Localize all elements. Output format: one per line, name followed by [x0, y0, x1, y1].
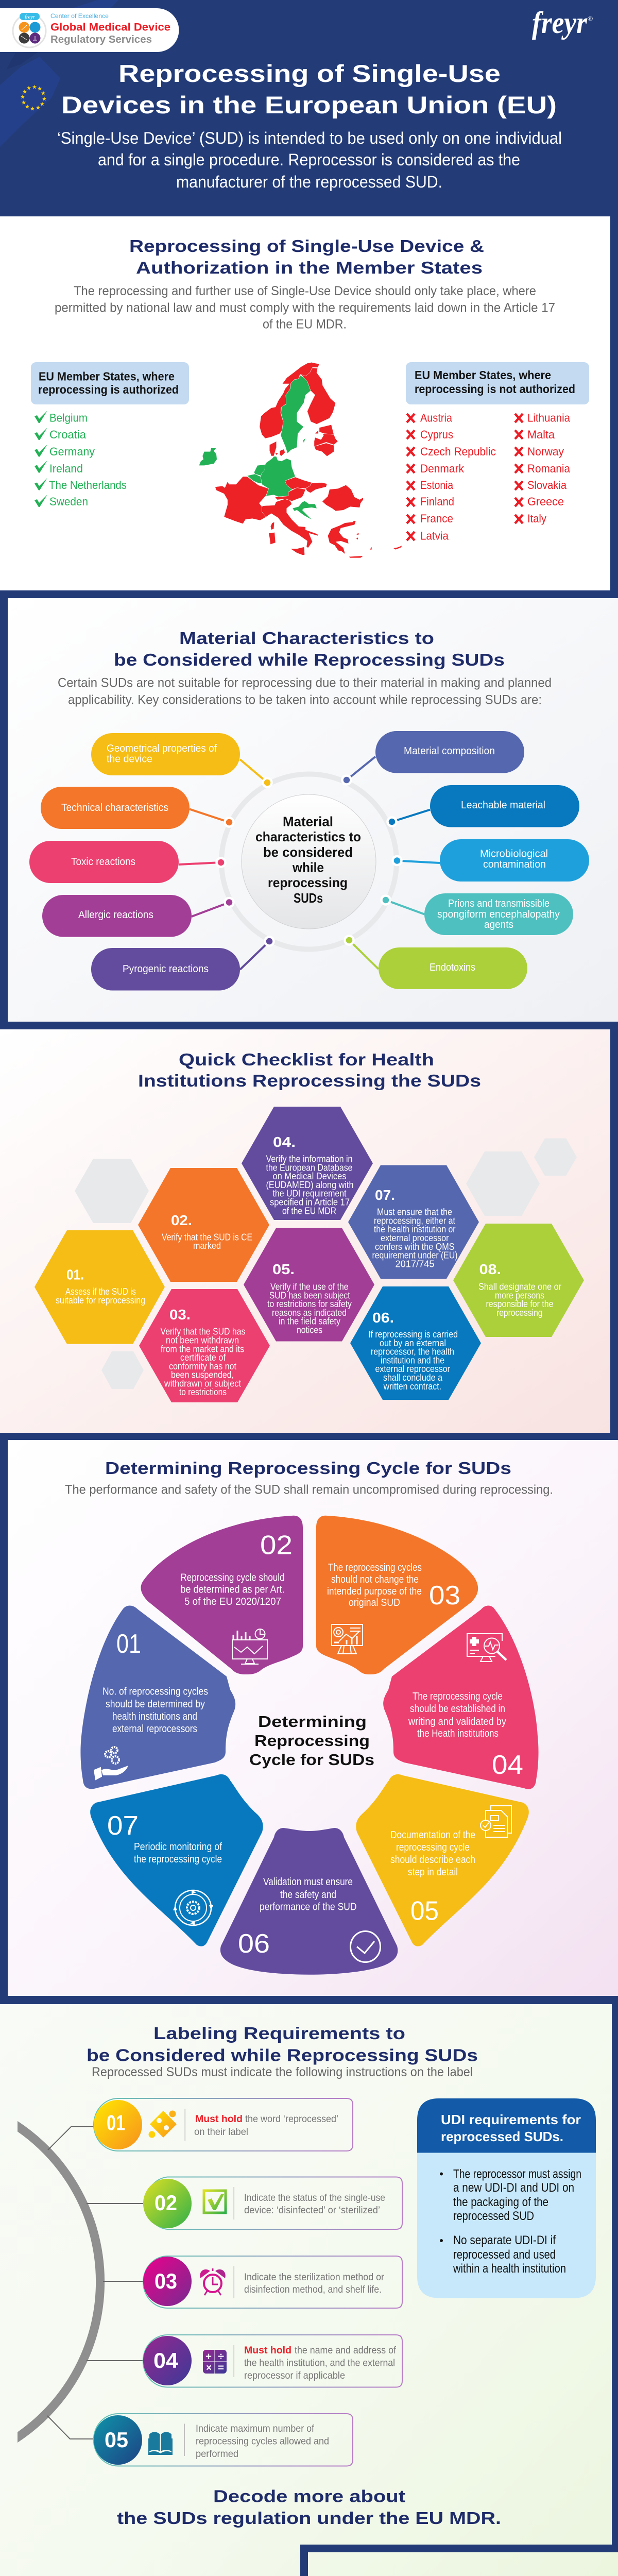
item: France — [407, 512, 453, 525]
pill: geometrical properties — [91, 733, 240, 775]
pill: prions: Prions and transmissible — [448, 898, 550, 909]
petal 02: 02 — [260, 1530, 293, 1560]
requirement 03 — [143, 2256, 402, 2308]
icon: checkbox — [204, 2191, 226, 2213]
petal 07: 07 — [107, 1811, 139, 1841]
intro text: and for a single procedure. Reprocessor is considered as the — [98, 150, 520, 169]
callout: UDI requirements: a new UDI-DI and UDI on — [453, 2181, 574, 2195]
requirement 01: 01 — [107, 2110, 125, 2135]
requirement 02 — [143, 2177, 402, 2229]
petal 02: be determined as per Art. — [180, 1584, 284, 1595]
petal 04: the Heath institutions — [417, 1728, 499, 1739]
title: Devices in the European Union (EU) — [61, 91, 557, 118]
icon: calculator: = — [218, 2363, 224, 2374]
icon: calculator: × — [206, 2363, 212, 2374]
item: Austria: Austria — [420, 411, 453, 425]
pill: leachable material — [430, 785, 579, 827]
icon: presentation board — [332, 1624, 363, 1654]
description: of the EU MDR. — [263, 317, 347, 332]
pill: technical characteristics: Technical characteristics — [61, 802, 168, 814]
item: Sweden: Sweden — [49, 495, 88, 508]
item: Germany: Germany — [49, 445, 95, 458]
petal 04 — [383, 1605, 539, 1789]
step 03: to restrictions — [179, 1387, 227, 1397]
item: Finland: Finland — [420, 495, 454, 508]
petal 03: The reprocessing cycles — [328, 1562, 422, 1573]
item: Cyprus: Cyprus — [420, 428, 453, 441]
petal 01: should be determined by — [106, 1699, 205, 1710]
step 03: Verify that the SUD has — [161, 1327, 245, 1337]
icon: check circle — [350, 1931, 380, 1962]
map: Europe — [199, 362, 402, 558]
petal 03: 03 — [429, 1581, 460, 1611]
pill: material composition — [375, 731, 524, 773]
requirement 03: Indicate the sterilization method or — [244, 2272, 384, 2283]
heading — [129, 236, 484, 277]
call to action heading: the SUDs regulation under the EU MDR. — [117, 2509, 501, 2528]
step 06: out by an external — [380, 1338, 446, 1348]
heading: be Considered while Reprocessing SUDs — [87, 2045, 478, 2065]
item: Latvia — [407, 530, 449, 542]
requirement 02: 02 — [154, 2191, 177, 2215]
item: Ireland: Ireland — [49, 462, 83, 475]
step 05 — [244, 1228, 374, 1342]
logo: freyr: ® — [588, 16, 593, 22]
panel: quick checklist — [0, 1029, 610, 1433]
callout: UDI requirements: reprocessed SUDs. — [441, 2129, 563, 2144]
item: Finland — [407, 495, 454, 508]
connectors — [47, 2127, 143, 2439]
step 07: confers with the QMS — [375, 1242, 454, 1252]
callout: authorized heading: EU Member States, where — [39, 370, 175, 383]
center label: Cycle for SUDs — [249, 1751, 374, 1769]
connectors — [179, 757, 440, 970]
step 05: notices — [297, 1325, 322, 1335]
step 04: on Medical Devices — [273, 1171, 346, 1181]
step 05: 05. — [272, 1261, 295, 1277]
petal 06 — [220, 1828, 398, 1975]
step 01: 01. — [66, 1266, 84, 1283]
step 04 — [242, 1107, 373, 1220]
center hub: while — [292, 859, 324, 875]
step 06: 06. — [372, 1310, 394, 1326]
icon: dashboard monitor — [232, 1629, 267, 1664]
step 06: If reprocessing is carried — [368, 1329, 458, 1340]
petal 06: 06 — [238, 1929, 270, 1959]
requirement 05: Indicate maximum number of — [196, 2423, 315, 2434]
item: Belgium: Belgium — [49, 411, 88, 425]
logo: freyr: freyr — [532, 6, 588, 40]
step 03: conformity has not — [169, 1361, 236, 1371]
requirement 01 — [94, 2098, 353, 2151]
icon: monitor and magnifier — [467, 1634, 506, 1662]
step 04: Verify the information in — [266, 1154, 352, 1164]
petal 05: reprocessing cycle — [396, 1842, 470, 1853]
description — [55, 284, 555, 332]
panel: authorization in member states — [0, 216, 610, 590]
step 04: (EUDAMED) along with — [266, 1180, 353, 1190]
petal 03 — [316, 1516, 478, 1674]
step 05: reasons as indicated — [272, 1308, 347, 1318]
petal 01: health institutions and — [112, 1711, 197, 1722]
step 08: more persons — [495, 1290, 544, 1300]
step 05: in the field safety — [279, 1316, 340, 1327]
requirement 03: disinfection method, and shelf life. — [244, 2284, 382, 2295]
pill: leachable material: Leachable material — [461, 800, 545, 811]
step 02: marked — [193, 1241, 221, 1251]
step 03: certificate of — [180, 1352, 226, 1363]
callout: not authorized heading: reprocessing is not authorized — [415, 382, 575, 396]
icon: cycle gear — [173, 1890, 213, 1925]
requirement 01: on their label — [194, 2126, 248, 2138]
item: Greece: Greece — [527, 495, 564, 508]
step 02: Verify that the SUD is CE — [162, 1232, 252, 1243]
center label: Determining — [258, 1713, 367, 1731]
icon: EU stars — [21, 84, 46, 111]
petal 03: should not change the — [331, 1574, 419, 1585]
item: France: France — [420, 512, 453, 525]
item: Italy — [515, 512, 546, 525]
step 05: Verify if the use of the — [270, 1282, 348, 1292]
badge: center of excellence — [0, 8, 179, 52]
item: Estonia: Estonia — [420, 479, 454, 492]
step 04: the UDI requirement — [273, 1189, 346, 1199]
pill: technical characteristics — [41, 787, 190, 829]
badge: center of excellence: Global Medical Device — [50, 22, 170, 33]
item: Ireland — [35, 461, 83, 475]
pill: geometrical properties: Geometrical properties of — [107, 743, 217, 754]
pill: prions: agents — [484, 919, 513, 930]
step 06: reprocessor, the health — [371, 1347, 454, 1357]
panel: labeling requirements — [0, 2004, 618, 2576]
heading: Material Characteristics to — [179, 629, 434, 648]
item: Malta: Malta — [527, 428, 555, 441]
item: The Netherlands: The Netherlands — [49, 479, 127, 492]
call to action heading: Decode more about — [213, 2486, 405, 2506]
callout: authorized heading: reprocessing is authorized — [38, 383, 179, 396]
item: Belgium — [35, 411, 88, 425]
item: Norway: Norway — [527, 445, 564, 458]
requirement 04: reprocessor if applicable — [244, 2370, 345, 2381]
requirement 05: performed — [196, 2448, 238, 2460]
center hub: characteristics to — [255, 829, 361, 844]
petal 02: Reprocessing cycle should — [180, 1572, 284, 1584]
item: Croatia — [35, 428, 87, 441]
heading: Labeling Requirements to — [153, 2024, 405, 2043]
requirement 05: reprocessing cycles allowed and — [196, 2436, 329, 2447]
callout: UDI requirements: the packaging of the — [453, 2195, 548, 2209]
step 08: responsible for the — [486, 1299, 553, 1309]
heading: Quick Checklist for Health — [179, 1050, 434, 1069]
item: Estonia — [407, 479, 454, 492]
callout: UDI requirements: The reprocessor must assign — [453, 2167, 581, 2181]
heading: Determining Reprocessing Cycle for SUDs — [105, 1459, 511, 1478]
call to action heading — [117, 2486, 501, 2528]
callout: UDI requirements: No separate UDI-DI if — [453, 2233, 556, 2247]
petal 04: should be established in — [410, 1703, 505, 1715]
callout: not authorized heading: EU Member States, where — [415, 368, 551, 382]
step 06: external reprocessor — [375, 1364, 450, 1374]
step 02 — [138, 1168, 269, 1282]
pill: microbiological contamination: Microbiological — [480, 848, 548, 859]
icon: calculator — [203, 2350, 227, 2374]
center hub — [242, 794, 376, 929]
pill: endotoxins: Endotoxins — [430, 962, 475, 973]
petal 06: the safety and — [280, 1889, 336, 1901]
step 04: of the EU MDR — [282, 1206, 336, 1216]
petal 07: Periodic monitoring of — [134, 1841, 222, 1853]
heading: Institutions Reprocessing the SUDs — [138, 1071, 481, 1090]
step 08: Shall designate one or — [478, 1282, 561, 1292]
item: Latvia: Latvia — [420, 530, 449, 542]
requirement 05: 05 — [105, 2428, 128, 2452]
step 07: Must ensure that the — [377, 1207, 452, 1217]
requirement 05 — [94, 2414, 353, 2466]
pill: material composition: Material composition — [404, 745, 495, 757]
pill: microbiological contamination — [440, 839, 589, 882]
icon: calculator: ÷ — [218, 2351, 224, 2362]
icon: gears and hand — [94, 1747, 128, 1780]
callout: UDI requirements: within a health institution — [453, 2262, 566, 2276]
description: applicability. Key considerations to be taken into account while reprocessing SUDs are: — [68, 692, 542, 707]
pill: toxic reactions — [29, 841, 179, 883]
step 03: 03. — [169, 1307, 191, 1323]
arrow — [291, 2545, 618, 2576]
step 07: reprocessing, either at — [374, 1215, 455, 1226]
step 04: 04. — [273, 1134, 296, 1150]
item: Lithuania: Lithuania — [527, 411, 571, 425]
requirement 04: Must hold — [244, 2345, 291, 2356]
decorative gray hexagons — [75, 1139, 577, 1389]
step 03: not been withdrawn — [166, 1335, 239, 1346]
center hub: SUDs — [294, 890, 323, 906]
petal 01: 01 — [116, 1629, 141, 1659]
petal 07 — [90, 1774, 263, 1946]
item: Denmark: Denmark — [420, 462, 465, 475]
heading: be Considered while Reprocessing SUDs — [114, 650, 505, 669]
step 02: 02. — [171, 1212, 192, 1228]
panel: material characteristics — [8, 598, 618, 1022]
step 08: reprocessing — [496, 1308, 543, 1318]
center label: Reprocessing — [254, 1732, 370, 1750]
badge: center of excellence: Center of Excellence — [50, 12, 109, 20]
petal 04: The reprocessing cycle — [413, 1691, 503, 1702]
callout: UDI requirements: reprocessed SUD — [453, 2209, 534, 2223]
heading — [87, 2024, 478, 2065]
pill: endotoxins — [379, 947, 527, 989]
pill: prions: spongiform encephalopathy — [437, 909, 560, 920]
ring nodes — [216, 776, 402, 946]
item: Slovakia: Slovakia — [527, 479, 567, 492]
step 07: external processor — [381, 1233, 449, 1243]
intro text: manufacturer of the reprocessed SUD. — [176, 173, 442, 191]
item: Romania: Romania — [527, 462, 571, 475]
step 07: 2017/745 — [396, 1259, 435, 1269]
step 06: shall conclude a — [383, 1372, 443, 1383]
panel: determining reprocessing cycle — [8, 1440, 618, 1996]
step 03: withdrawn or subject — [164, 1379, 241, 1389]
heading: Reprocessing of Single-Use Device & — [129, 236, 484, 256]
pill: microbiological contamination: contamination — [483, 859, 546, 870]
petal 06: performance of the SUD — [260, 1901, 356, 1912]
badge: center of excellence: Regulatory Services — [50, 34, 152, 45]
step 03: been suspended, — [171, 1370, 234, 1380]
step 06: institution and the — [381, 1355, 444, 1365]
icon: puzzle — [148, 2110, 177, 2138]
petal 02 — [141, 1516, 303, 1674]
requirement 02: device: ‘disinfected’ or ‘sterilized’ — [244, 2205, 380, 2216]
pill: pyrogenic reactions: Pyrogenic reactions — [123, 963, 209, 975]
petal 06: Validation must ensure — [263, 1876, 353, 1888]
step 03 — [139, 1289, 270, 1402]
petal 05: step in detail — [408, 1867, 458, 1878]
heading — [138, 1050, 481, 1090]
requirement 01: Must hold — [195, 2113, 243, 2125]
list: authorized states — [35, 411, 127, 508]
step 07: requirement under (EU) — [372, 1250, 457, 1261]
item: Germany — [35, 444, 95, 458]
description: permitted by national law and must comply with the requirements laid down in the Article 17 — [55, 301, 555, 315]
item: Czech Republic: Czech Republic — [420, 445, 496, 458]
requirement 02: Indicate the status of the single-use — [244, 2192, 385, 2204]
pill: prions — [424, 893, 573, 935]
intro text — [57, 129, 562, 191]
requirement 04: 04 — [153, 2348, 179, 2372]
item: Italy: Italy — [527, 512, 546, 525]
page frame strip — [612, 2004, 618, 2552]
petal 04: writing and validated by — [408, 1716, 506, 1727]
icon: alarm clock — [200, 2268, 226, 2295]
step 03: from the market and its — [161, 1344, 244, 1354]
requirement 04: the health institution, and the external — [244, 2358, 395, 2369]
center hub: reprocessing — [268, 875, 348, 890]
center hub: Material — [283, 814, 333, 829]
pill: allergic reactions — [42, 895, 192, 937]
badge: center of excellence: freyr — [25, 14, 36, 20]
item: Malta — [515, 428, 555, 441]
step 06: written contract. — [383, 1381, 441, 1392]
decorative ribbon — [0, 0, 118, 147]
panel: header — [0, 0, 593, 191]
item: Sweden — [35, 495, 88, 508]
callout: UDI requirements: UDI requirements for — [441, 2112, 581, 2127]
callout: UDI requirements — [417, 2098, 596, 2298]
petal 05: 05 — [410, 1896, 439, 1926]
callout: authorized heading — [31, 362, 189, 404]
step 01 — [35, 1230, 165, 1344]
petal 01 — [80, 1605, 235, 1789]
petal 05: Documentation of the — [390, 1829, 475, 1841]
step 01: Assess if the SUD is — [65, 1286, 136, 1297]
step 06 — [350, 1286, 481, 1400]
icon: documents — [480, 1806, 511, 1837]
description: Certain SUDs are not suitable for reprocessing due to their material in making and planned — [58, 676, 552, 690]
petal 07: the reprocessing cycle — [134, 1854, 222, 1865]
intro text: ‘Single-Use Device’ (SUD) is intended to be used only on one individual — [57, 129, 562, 147]
description: The performance and safety of the SUD shall remain uncompromised during reprocessing. — [65, 1483, 553, 1497]
step 05: to restrictions for safety — [267, 1299, 352, 1309]
requirement 04 — [143, 2335, 402, 2387]
description: The reprocessing and further use of Single-Use Device should only take place, where — [74, 284, 536, 298]
requirement 01: the word ‘reprocessed’ — [245, 2113, 338, 2125]
step 04: specified in Article 17 — [270, 1197, 350, 1208]
diagram ring — [221, 774, 397, 949]
callout: not authorized heading — [406, 362, 589, 404]
description: Reprocessed SUDs must indicate the following instructions on the label — [92, 2065, 473, 2079]
item: Cyprus — [407, 428, 453, 441]
item: Austria — [407, 411, 453, 425]
petal 03: original SUD — [349, 1597, 400, 1608]
description — [58, 676, 552, 707]
curved spine — [7, 2120, 100, 2444]
pill: toxic reactions: Toxic reactions — [71, 856, 135, 868]
pill: geometrical properties: the device — [107, 753, 152, 765]
pill: allergic reactions: Allergic reactions — [78, 909, 153, 921]
step 07 — [348, 1165, 479, 1279]
step 08: 08. — [479, 1261, 501, 1277]
petal 01: external reprocessors — [112, 1723, 197, 1735]
requirement 03: 03 — [154, 2269, 177, 2293]
petal 04: 04 — [492, 1750, 523, 1780]
petal 05 — [356, 1774, 529, 1946]
center label — [249, 1713, 374, 1769]
step 07: the health institution or — [374, 1224, 455, 1234]
title: Reprocessing of Single-Use — [118, 60, 501, 87]
step 04: the European Database — [266, 1162, 352, 1173]
icon: calculator: + — [205, 2351, 212, 2362]
center hub: be considered — [263, 844, 353, 860]
petal 05: should describe each — [390, 1854, 475, 1866]
petal 03: intended purpose of the — [327, 1586, 422, 1597]
heading: Authorization in the Member States — [136, 258, 483, 277]
step 01: suitable for reprocessing — [56, 1295, 145, 1306]
petal 02: 5 of the EU 2020/1207 — [184, 1596, 281, 1607]
icon: book — [148, 2432, 173, 2455]
list: not authorized states — [407, 411, 571, 542]
requirement 04: the name and address of — [295, 2345, 397, 2356]
callout: UDI requirements: reprocessed and used — [453, 2248, 556, 2262]
step 07: 07. — [375, 1187, 395, 1203]
step 05: SUD has been subject — [269, 1290, 350, 1300]
title — [61, 60, 557, 118]
step 08 — [453, 1224, 584, 1337]
heading — [114, 629, 505, 669]
item: Croatia: Croatia — [49, 428, 87, 441]
pill: pyrogenic reactions — [91, 948, 240, 990]
petal 01: No. of reprocessing cycles — [102, 1686, 208, 1697]
